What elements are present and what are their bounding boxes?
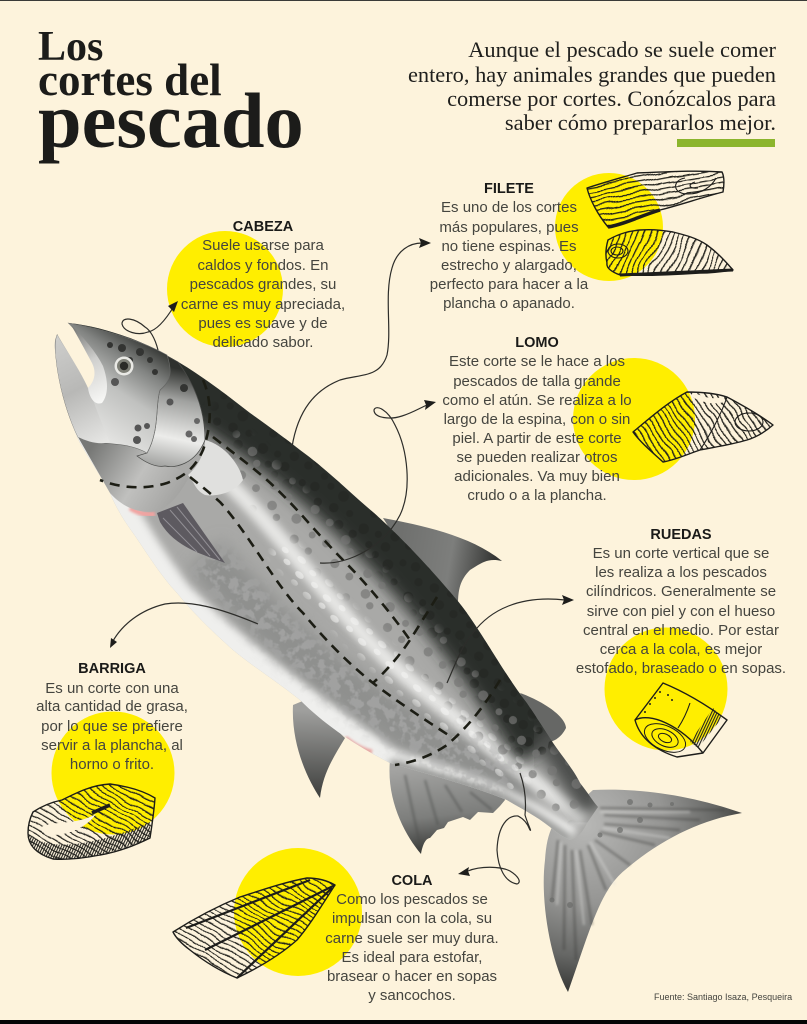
section: cabeza: caldos y fondos. En xyxy=(198,257,328,274)
intro text: comerse por cortes. Conózcalos para xyxy=(447,86,776,111)
intro text xyxy=(408,37,777,135)
cut illustration: barriga xyxy=(27,783,156,860)
section: cabeza: Suele usarse para xyxy=(202,237,325,254)
section: cola: COLA xyxy=(391,873,433,889)
lower jaw xyxy=(56,335,110,443)
section: cola: brasear o hacer en sopas xyxy=(327,968,497,985)
fin: adipose xyxy=(520,693,566,742)
section: lomo: adicionales. Va muy bien xyxy=(454,468,620,485)
arrow: barriga xyxy=(110,603,258,648)
section: lomo: se pueden realizar otros xyxy=(457,449,617,466)
section: cola xyxy=(325,873,499,1004)
fin: dorsal xyxy=(383,518,502,605)
section: ruedas: cilíndricos. Generalmente se xyxy=(586,583,776,600)
cut lines xyxy=(100,380,500,765)
upper jaw xyxy=(71,325,107,404)
section: ruedas: central en el medio. Por estar xyxy=(583,622,779,639)
section: ruedas: Es un corte vertical que se xyxy=(593,545,769,562)
head xyxy=(56,322,243,512)
section: cola: Es ideal para estofar, xyxy=(342,949,482,966)
section: filete: más populares, pues xyxy=(439,219,579,236)
section: barriga: por lo que se prefiere xyxy=(41,718,183,735)
fin: tail xyxy=(544,790,742,992)
arrow: cabeza xyxy=(122,301,178,350)
section: cabeza xyxy=(181,219,345,351)
section: cabeza: delicado sabor. xyxy=(213,334,313,351)
section: ruedas: estofado, braseado o en sopas. xyxy=(576,660,786,677)
section: cabeza: carne es muy apreciada, xyxy=(181,296,345,313)
section: lomo: piel. A partir de este corte xyxy=(452,430,622,447)
section: barriga: BARRIGA xyxy=(78,661,146,677)
fish body xyxy=(54,323,598,838)
section: barriga xyxy=(36,661,188,773)
intro text: Aunque el pescado se suele comer xyxy=(468,37,777,62)
shoulder bulge xyxy=(188,440,243,495)
fin: pectoral xyxy=(157,503,225,563)
arrow: cola xyxy=(458,773,531,884)
green accent bar xyxy=(677,139,775,147)
section: ruedas: les realiza a los pescados xyxy=(595,564,767,581)
section: cola: carne suele ser muy dura. xyxy=(325,930,499,947)
fin: ventral xyxy=(293,700,345,798)
fin: anal xyxy=(389,760,505,854)
yellow circles xyxy=(52,173,728,976)
title: Los xyxy=(38,24,103,70)
section: barriga: horno o frito. xyxy=(70,756,154,773)
title: cortes del xyxy=(38,55,222,105)
section: cabeza: CABEZA xyxy=(233,219,294,235)
section: lomo: pescados de talla grande xyxy=(453,373,621,390)
cut illustration: lomo xyxy=(632,391,774,463)
section: cola: impulsan con la cola, su xyxy=(332,910,492,927)
head plate xyxy=(56,323,170,453)
gill cover xyxy=(137,355,205,467)
arrow: lomo xyxy=(320,400,436,563)
section: filete: estrecho y alargado, xyxy=(441,257,577,274)
section: lomo: LOMO xyxy=(515,335,559,351)
section: ruedas xyxy=(576,527,786,677)
arrow: ruedas xyxy=(447,595,574,683)
section: lomo: como el atún. Se realiza a lo xyxy=(442,392,632,409)
section: cabeza: pescados grandes, su xyxy=(190,276,336,293)
head spots xyxy=(107,342,200,444)
intro text: saber cómo prepararlos mejor. xyxy=(505,110,776,135)
section: ruedas: cerca a la cola, es mejor xyxy=(600,641,762,658)
section: cola: Como los pescados se xyxy=(336,891,488,908)
fish illustration xyxy=(40,300,742,992)
cut illustration: filete xyxy=(586,170,734,276)
section: filete: no tiene espinas. Es xyxy=(441,238,577,255)
section: lomo: crudo o a la plancha. xyxy=(467,487,607,504)
section: lomo: largo de la espina, con o sin xyxy=(444,411,630,428)
source note: Fuente: Santiago Isaza, Pesqueira xyxy=(654,992,792,1002)
section: barriga: servir a la plancha, al xyxy=(41,737,183,754)
section: cabeza: pues es suave y de xyxy=(198,315,328,332)
section: filete: FILETE xyxy=(484,181,534,197)
section: filete: plancha o apanado. xyxy=(443,295,575,312)
section: lomo: Este corte se le hace a los xyxy=(449,353,625,370)
section: barriga: alta cantidad de grasa, xyxy=(36,698,188,715)
cut illustration: cola xyxy=(172,877,336,979)
section: lomo xyxy=(442,335,632,504)
intro text: entero, hay animales grandes que pueden xyxy=(408,62,776,87)
eye xyxy=(114,356,134,376)
section: filete: perfecto para hacer a la xyxy=(430,276,589,293)
title: pescado xyxy=(38,77,304,164)
gill area xyxy=(78,437,190,512)
section: filete: Es uno de los cortes xyxy=(441,199,577,216)
arrow: filete xyxy=(292,238,431,447)
section: barriga: Es un corte con una xyxy=(45,680,179,697)
mouth gap xyxy=(56,322,102,388)
section: cola: y sancochos. xyxy=(368,987,456,1004)
section: filete xyxy=(430,181,589,312)
section: ruedas: sirve con piel y con el hueso xyxy=(587,603,775,620)
cut illustration: ruedas xyxy=(635,683,727,758)
title xyxy=(38,24,304,164)
section: ruedas: RUEDAS xyxy=(650,527,712,543)
